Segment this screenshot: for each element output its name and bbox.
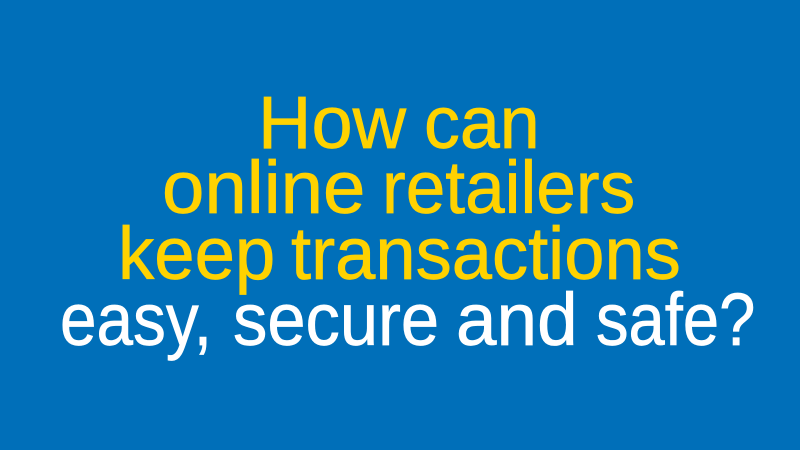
heading line 2 xyxy=(162,146,635,229)
heading line 3: transactions xyxy=(290,212,680,295)
heading line 1 xyxy=(258,81,540,164)
heading line 4: easy, xyxy=(60,278,212,361)
heading line 2: online xyxy=(162,146,365,229)
heading line 2: retailers xyxy=(382,146,635,229)
heading line 4: secure xyxy=(233,278,439,361)
heading line 1: How xyxy=(258,81,406,164)
heading line 4: and xyxy=(456,278,578,361)
heading line 1: can xyxy=(424,81,540,164)
heading line 3 xyxy=(118,212,680,295)
heading line 3: keep xyxy=(118,212,275,295)
heading line 4: safe? xyxy=(596,278,755,361)
heading line 4 xyxy=(60,278,755,361)
